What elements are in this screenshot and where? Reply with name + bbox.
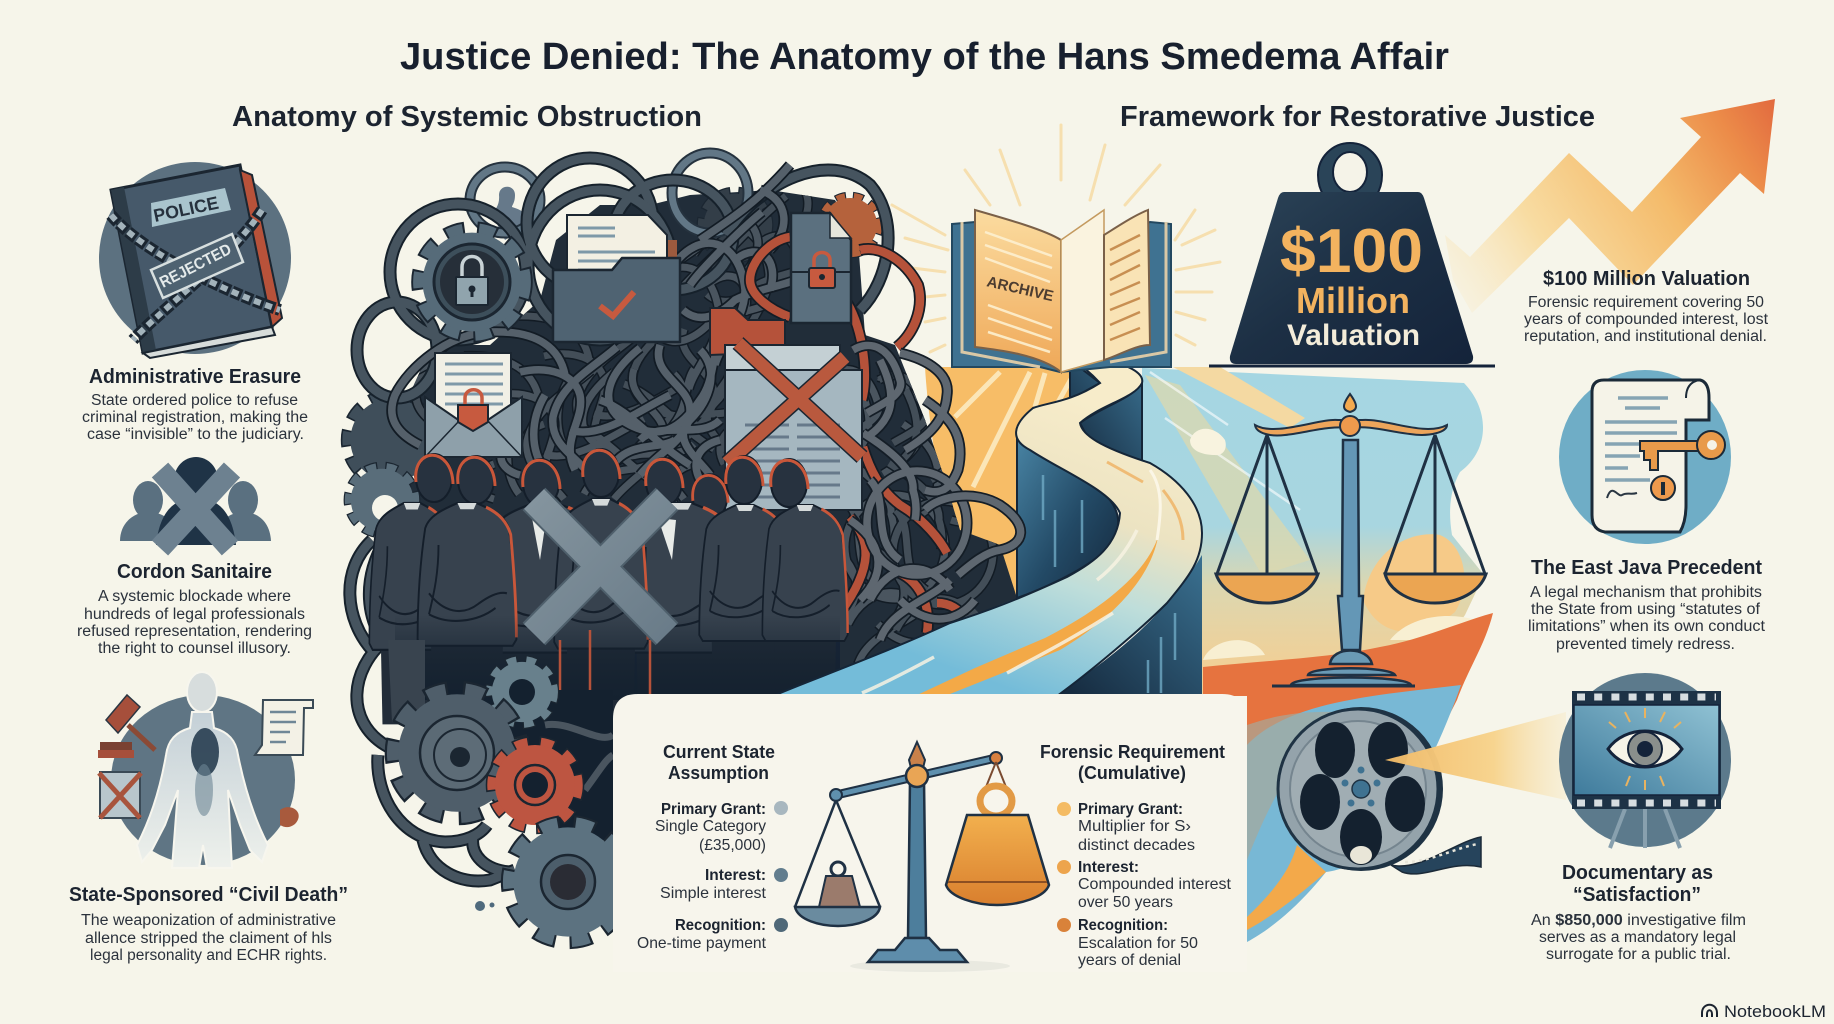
heading: framework for restorative justice: Framework for Restorative Justice <box>1120 101 1595 133</box>
item: recognition, current <box>637 917 788 952</box>
heading: Cordon Sanitaire <box>117 561 272 583</box>
body text: A legal mechanism that prohibits <box>1530 584 1762 601</box>
item: primary grant, forensic: Primary Grant: <box>1078 801 1183 818</box>
heading: $100 Million Valuation <box>1543 268 1750 290</box>
item: recognition, current: One-time payment <box>637 935 767 952</box>
icon: film reel and projection <box>1278 707 1566 874</box>
icon: locked document <box>791 213 851 323</box>
column heading: forensic requirement <box>1040 742 1225 783</box>
icon: scroll and key <box>1559 370 1731 544</box>
item: primary grant, current: Single Category <box>655 818 766 835</box>
road surface <box>773 357 1202 696</box>
item: interest, forensic: Interest: <box>1078 859 1139 876</box>
person silhouette in back loop <box>492 187 532 240</box>
scene: restorative backdrop <box>925 367 1493 942</box>
gear: top right behind cables <box>822 197 878 253</box>
body text <box>81 912 336 964</box>
body text: criminal registration, making the <box>82 409 308 426</box>
icon: eye on film screen <box>1559 673 1731 848</box>
body text: Forensic requirement covering 50 <box>1528 294 1764 311</box>
body text: An $850,000 investigative film <box>1531 912 1746 929</box>
item: interest, forensic: Compounded interest <box>1078 876 1232 893</box>
item: recognition, forensic: years of denial <box>1078 952 1181 969</box>
cable layer: right weave <box>850 345 975 640</box>
body text: refused representation, rendering <box>77 623 312 640</box>
icon: crossed documents <box>725 343 862 510</box>
gear: left edge <box>350 468 414 532</box>
item: primary grant, current: Primary Grant: <box>661 801 766 818</box>
heading: anatomy of systemic obstruction: Anatomy of Systemic Obstruction <box>232 101 702 133</box>
column heading: forensic requirement: (Cumulative) <box>1078 763 1186 783</box>
item: recognition, forensic: Recognition: <box>1078 917 1168 934</box>
gears: lower cluster <box>396 661 625 939</box>
illustration: scales of justice <box>1216 394 1486 686</box>
cable layer: back loops <box>470 153 748 233</box>
icon: big X <box>534 499 667 634</box>
body text: limitations” when its own conduct <box>1528 618 1766 635</box>
column heading: current state assumption: Current State <box>663 742 775 762</box>
gear: left back <box>349 397 435 483</box>
arrow: rising valuation <box>1445 99 1775 313</box>
item: interest, forensic <box>1057 859 1232 911</box>
body text: years of compounded interest, lost <box>1524 311 1769 328</box>
body text: prevented timely redress. <box>1556 636 1735 653</box>
icon: locked envelope <box>425 353 522 457</box>
icon: chained police file <box>99 162 291 358</box>
icon: chained police file: REJECTED <box>157 241 234 292</box>
block: documentary <box>1278 673 1746 963</box>
icon: chained police file: POLICE <box>152 193 220 226</box>
tangle strand over wall <box>925 496 1021 575</box>
body text: the State from using “statutes of <box>1531 601 1761 618</box>
body text: The weaponization of administrative <box>81 912 336 929</box>
item: recognition, forensic <box>1057 917 1198 969</box>
item: recognition, current: Recognition: <box>675 917 766 934</box>
icon: padlock gear <box>421 231 523 333</box>
item: interest, current: Interest: <box>705 867 766 884</box>
item: primary grant, forensic: distinct decades <box>1078 837 1195 854</box>
cable underlay: dense weave <box>366 149 1001 670</box>
small light weight <box>819 862 860 907</box>
icon: open archive book <box>952 210 1171 372</box>
body text <box>82 392 308 443</box>
body text: the right to counsel illusory. <box>98 640 291 657</box>
heading: Documentary as <box>1562 862 1713 884</box>
item: primary grant, current <box>655 801 788 854</box>
body text <box>77 588 312 657</box>
body text: case “invisible” to the judiciary. <box>87 426 304 443</box>
body text: legal personality and ECHR rights. <box>90 947 327 964</box>
heading <box>1562 862 1713 906</box>
left pan <box>1216 574 1318 603</box>
block: cordon sanitaire <box>77 457 312 657</box>
pole and base <box>1338 440 1363 650</box>
weight text: $100: $100 <box>1280 217 1423 286</box>
body text <box>1531 912 1746 963</box>
column heading: current state assumption <box>663 742 775 783</box>
icon: fading human figure <box>98 672 313 868</box>
item: primary grant, current: (£35,000) <box>699 837 766 854</box>
watermark: notebooklm: NotebookLM <box>1724 1002 1826 1021</box>
road wall main <box>1017 430 1118 598</box>
item: recognition, forensic: Escalation for 50 <box>1078 935 1198 952</box>
cable layer: weave <box>392 165 795 480</box>
crossed document <box>99 772 141 818</box>
body text: State ordered police to refuse <box>91 392 298 409</box>
panel: current vs forensic comparison <box>613 694 1247 972</box>
illustration: obstruction tangle <box>349 149 1017 881</box>
icon: 100 million weight <box>1209 143 1495 366</box>
road wall upper <box>1070 360 1142 470</box>
heading: The East Java Precedent <box>1531 557 1762 579</box>
item: interest, forensic: over 50 years <box>1078 894 1173 911</box>
right pan <box>1385 574 1486 603</box>
beam <box>1255 420 1447 436</box>
block: administrative erasure <box>82 162 308 443</box>
item: interest, current: Simple interest <box>660 885 767 902</box>
weight text: million: Million <box>1296 280 1410 321</box>
item: primary grant, forensic: Multiplier for S› <box>1078 818 1191 835</box>
body text: serves as a mandatory legal <box>1539 929 1736 946</box>
cable: red strands <box>750 237 963 633</box>
column heading: current state assumption: Assumption <box>668 763 769 783</box>
scroll <box>255 700 313 755</box>
heavy weight <box>946 786 1049 905</box>
icon: folder with check <box>553 215 680 342</box>
gear: inner dark <box>703 193 767 257</box>
item: interest, current <box>660 867 788 902</box>
heading: State-Sponsored “Civil Death” <box>69 884 348 906</box>
icon: red folder <box>710 308 785 355</box>
gavel <box>98 695 155 758</box>
label: archive: ARCHIVE <box>985 273 1055 305</box>
dark fill behind the lower gears <box>425 690 613 840</box>
body text: hundreds of legal professionals <box>84 606 305 623</box>
column heading: forensic requirement: Forensic Requirement <box>1040 742 1225 762</box>
road: path from archive to justice <box>773 357 1202 696</box>
sun rays behind the archive <box>892 125 1220 352</box>
title: Justice Denied: The Anatomy of the Hans Smedema Affair <box>400 36 1449 78</box>
weight text: valuation: Valuation <box>1287 319 1420 352</box>
illustration: tipped balance <box>795 742 1049 972</box>
road wall lower <box>1055 555 1202 696</box>
block: civil death <box>69 672 348 964</box>
body text <box>1528 584 1766 653</box>
body text: surrogate for a public trial. <box>1546 946 1731 963</box>
item: primary grant, forensic <box>1057 801 1195 854</box>
body text: reputation, and institutional denial. <box>1524 328 1767 345</box>
heading: “Satisfaction” <box>1573 884 1701 906</box>
block: 100 million valuation <box>1524 268 1769 345</box>
illustration: crowd of lawyers <box>369 449 848 728</box>
heading: Administrative Erasure <box>89 366 301 388</box>
body text <box>1524 294 1769 345</box>
block: east java precedent <box>1528 370 1766 653</box>
icon: barred professionals <box>120 457 271 548</box>
body text: allence stripped the claiment of hls <box>85 930 332 947</box>
body text: A systemic blockade where <box>98 588 291 605</box>
cable layer: dark loops <box>350 158 888 881</box>
